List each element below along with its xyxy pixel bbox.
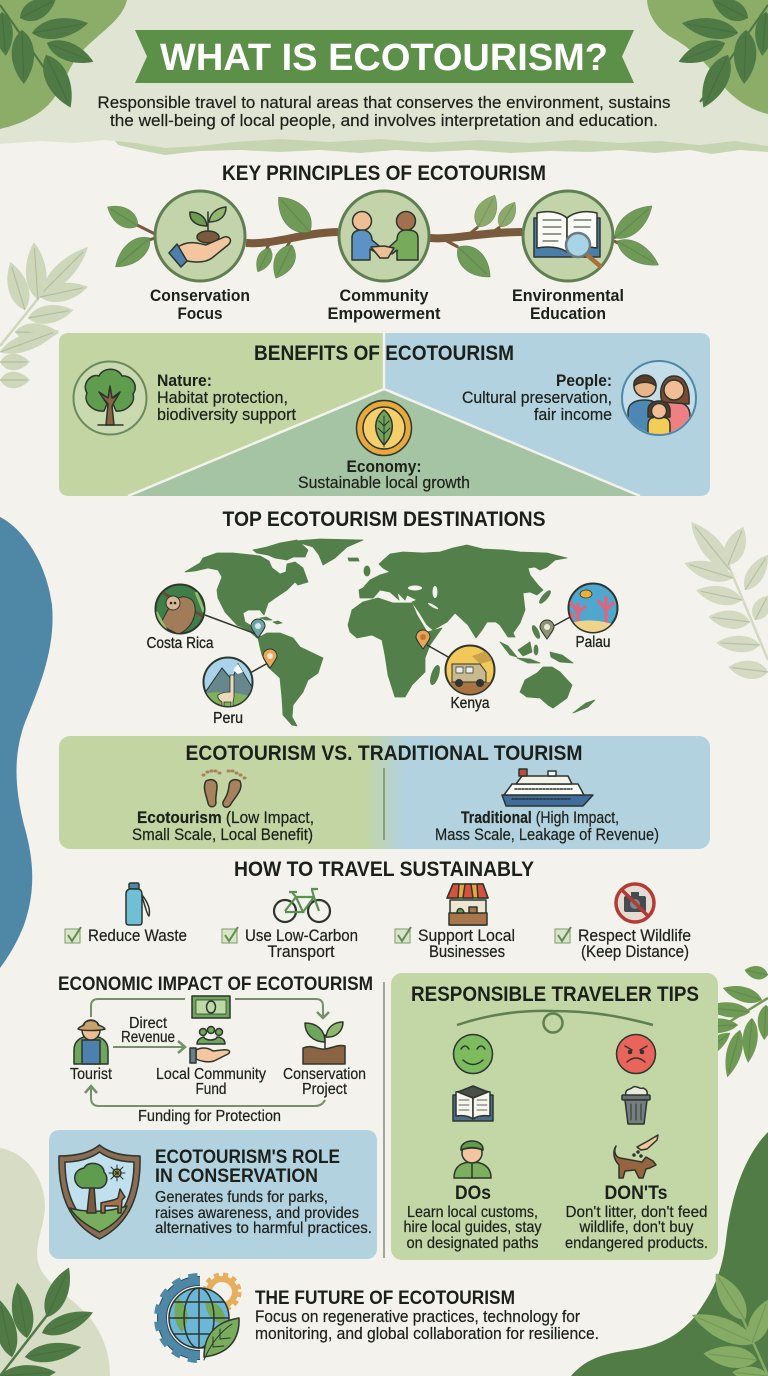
tip: low-carbon transport: Transport: [268, 942, 335, 961]
curved flourish: [457, 1011, 653, 1032]
heading: economic impact: ECONOMIC IMPACT OF ECOTOURISM: [58, 973, 373, 995]
heading: key principles: KEY PRINCIPLES OF ECOTOURISM: [222, 161, 546, 185]
text: people: fair income: [534, 405, 612, 424]
label: peru: Peru: [213, 710, 243, 727]
decoration: right green fronds: [681, 964, 768, 1079]
icon: map pin: [251, 619, 265, 638]
principle: conservation focus: Conservation: [150, 286, 250, 305]
label: local community fund: Local Community: [156, 1066, 266, 1083]
label: conservation project: Project: [302, 1081, 348, 1098]
principle: community empowerment: Community: [340, 286, 429, 305]
heading: benefits: BENEFITS OF ECOTOURISM: [254, 341, 514, 365]
text: donts: endangered products.: [565, 1235, 708, 1252]
icon: footprints: [203, 771, 245, 807]
text: ecotourism: Small Scale, Local Benefit): [132, 825, 313, 844]
label: local community fund: [156, 1066, 266, 1098]
text: ecotourism: Ecotourism (Low Impact,: [137, 808, 314, 827]
section: economic impact: [58, 973, 373, 1125]
tip: reduce waste: [65, 883, 187, 945]
heading: vs: ECOTOURISM VS. TRADITIONAL TOURISM: [186, 741, 582, 765]
section: future of ecotourism: [157, 1275, 599, 1360]
icon: two people shaking hands: [352, 212, 418, 260]
decoration: bottom-right foliage: [571, 1132, 768, 1376]
icon: open book and magnifier: [534, 212, 600, 266]
principle: environmental education: [512, 191, 624, 323]
arrow: funding loop: [85, 1086, 325, 1106]
text: dos: DOs: [455, 1183, 491, 1204]
text: nature: [157, 371, 296, 424]
label: conservation project: [283, 1066, 366, 1098]
australia: [520, 667, 572, 708]
label: direct revenue: Direct: [129, 1015, 168, 1032]
text: nature: biodiversity support: [157, 405, 296, 424]
intro text: Responsible travel to natural areas that conserves the environment, sustains: [98, 93, 670, 112]
tip: low-carbon transport: Use Low-Carbon: [245, 926, 358, 945]
text: people: Cultural preservation,: [462, 388, 612, 407]
heading: role: [155, 1147, 340, 1187]
heading: travel sustainably: HOW TO TRAVEL SUSTAINABLY: [234, 857, 534, 881]
text: traditional: Traditional (High Impact,: [461, 808, 619, 827]
text: traditional: [435, 808, 659, 844]
medallion: coral reef: [568, 584, 620, 636]
title banner: WHAT IS ECOTOURISM?: [160, 37, 608, 79]
tip: support local businesses: Businesses: [429, 942, 505, 961]
destination: kenya: [416, 630, 494, 712]
icon: leaf coin: [356, 400, 412, 456]
icon: checkbox: [395, 927, 411, 943]
destination: palau: [540, 584, 620, 651]
text: future body: monitoring, and global collaboration for resilience.: [255, 1324, 599, 1343]
panel: role in conservation: [49, 1130, 377, 1259]
label: funding for protection: Funding for Protection: [138, 1108, 281, 1125]
text: economy: [298, 457, 470, 492]
text: role body: raises awareness, and provides: [155, 1205, 359, 1222]
text: donts: Don't litter, don't feed: [566, 1204, 708, 1221]
branch with leaves: [103, 189, 663, 285]
icon: cruise ship: [502, 769, 593, 806]
panel: benefits: [59, 333, 710, 496]
text: role body: Generates funds for parks,: [155, 1189, 328, 1206]
icon: park guide: [454, 1141, 491, 1178]
text: traditional: Mass Scale, Leakage of Revenue): [435, 825, 659, 844]
decoration: bottom-left foliage: [0, 1148, 110, 1376]
icon: checkbox: [65, 927, 81, 943]
principle: community empowerment: Empowerment: [328, 304, 441, 323]
panel: ecotourism vs traditional: [59, 736, 710, 849]
panel: responsible traveler tips: [391, 973, 718, 1260]
column divider: [383, 982, 385, 1258]
icon: no camera: [616, 884, 654, 922]
text: nature: Habitat protection,: [157, 388, 288, 407]
principle: community empowerment: [328, 191, 441, 323]
inland seas: [408, 586, 439, 610]
label: direct revenue: [121, 1015, 175, 1046]
tip: support local businesses: [395, 884, 515, 961]
text: donts: [565, 1183, 708, 1252]
text: dos: [404, 1183, 542, 1252]
principle: environmental education: Education: [530, 304, 606, 323]
tip: support local businesses: Support Local: [418, 926, 515, 945]
label: palau: Palau: [576, 634, 610, 651]
icon: hand holding seedling: [169, 207, 230, 267]
tip: low-carbon transport: [222, 889, 358, 961]
text: ecotourism: [132, 808, 314, 844]
text: future body: Focus on regenerative practices, technology for: [255, 1307, 580, 1326]
icon: community hand: [190, 1026, 230, 1063]
label: tourist: Tourist: [70, 1066, 113, 1083]
decoration: left blue blob: [0, 517, 53, 968]
text: donts: wildlife, don't buy: [579, 1219, 694, 1236]
icon: map pin: [540, 620, 554, 639]
medallion: safari jeep: [446, 646, 494, 696]
africa: [348, 598, 442, 697]
text: economy: Economy:: [346, 457, 422, 476]
heading: role: IN CONSERVATION: [155, 1166, 318, 1187]
islands: [573, 700, 595, 713]
intro text: [98, 93, 670, 130]
text: future body: [255, 1307, 599, 1343]
text: donts: DON'Ts: [604, 1183, 668, 1204]
icon: smiling face: [454, 1034, 492, 1074]
north america: [185, 553, 308, 638]
label: direct revenue: Revenue: [121, 1029, 175, 1046]
world map: [185, 539, 595, 726]
icon: bicycle: [274, 889, 330, 922]
label: local community fund: Fund: [196, 1081, 226, 1098]
icon: banknote: [192, 996, 230, 1018]
tip: respect wildlife: [555, 884, 691, 961]
principle: environmental education: Environmental: [512, 286, 624, 305]
destination: costa rica: [146, 584, 265, 652]
medallion: llama: [202, 656, 254, 708]
intro text: the well-being of local people, and involves interpretation and education.: [110, 111, 658, 130]
icon: checkbox: [222, 927, 238, 943]
tip: reduce waste: Reduce Waste: [88, 926, 187, 945]
icon: map pin: [416, 630, 430, 649]
icon: family: [622, 361, 696, 440]
icon: shield: [59, 1145, 140, 1239]
text: people: [462, 371, 612, 424]
decoration: top-left foliage: [0, 0, 127, 129]
icon: tourist: [74, 1020, 108, 1064]
icon: water bottle: [126, 883, 149, 925]
icon: map pin: [263, 649, 277, 668]
text: economy: Sustainable local growth: [298, 473, 470, 492]
icon: conservation sprout: [303, 1022, 345, 1064]
icon: angry face: [616, 1034, 656, 1074]
tip: respect wildlife: Respect Wildlife: [578, 926, 691, 945]
text: dos: Learn local customs,: [407, 1204, 538, 1221]
decoration: top torn band: [0, 0, 768, 155]
arrow: tourist to project, top loop: [91, 999, 329, 1018]
heading: future: THE FUTURE OF ECOTOURISM: [255, 1287, 515, 1309]
destination: peru: [200, 649, 277, 727]
label: kenya: Kenya: [450, 695, 490, 712]
icon: market stall: [447, 884, 488, 925]
decoration: top-right foliage: [647, 0, 768, 114]
heading: tips: RESPONSIBLE TRAVELER TIPS: [411, 982, 699, 1006]
decoration: left pale fronds: [0, 241, 94, 388]
label: conservation project: Conservation: [283, 1066, 366, 1083]
label: costa rica: Costa Rica: [146, 635, 214, 652]
icon: checkbox: [555, 927, 571, 943]
decoration: right pale fronds: [682, 516, 768, 681]
principle: conservation focus: [150, 191, 250, 323]
heading: role: ECOTOURISM'S ROLE: [155, 1147, 340, 1168]
icon: book with graduation cap: [453, 1086, 493, 1121]
heading: destinations: TOP ECOTOURISM DESTINATIONS: [222, 507, 546, 531]
text: people: People:: [556, 371, 612, 390]
icon: gear, globe and leaf: [157, 1275, 241, 1360]
icon: tree in ring: [74, 362, 146, 434]
south america: [258, 633, 323, 726]
principle: conservation focus: Focus: [178, 304, 222, 323]
text: nature: Nature:: [157, 371, 212, 390]
eurasia: [359, 545, 567, 638]
text: role body: [155, 1189, 372, 1237]
text: role body: alternatives to harmful practices.: [155, 1220, 372, 1237]
icon: trash can: [622, 1087, 650, 1124]
icon: hand feeding dog: [614, 1135, 658, 1178]
text: dos: on designated paths: [406, 1235, 538, 1252]
tip: respect wildlife: (Keep Distance): [581, 942, 689, 961]
text: dos: hire local guides, stay: [404, 1219, 542, 1236]
medallion: sloth: [156, 584, 206, 634]
arrow: direct revenue: [113, 1041, 185, 1053]
